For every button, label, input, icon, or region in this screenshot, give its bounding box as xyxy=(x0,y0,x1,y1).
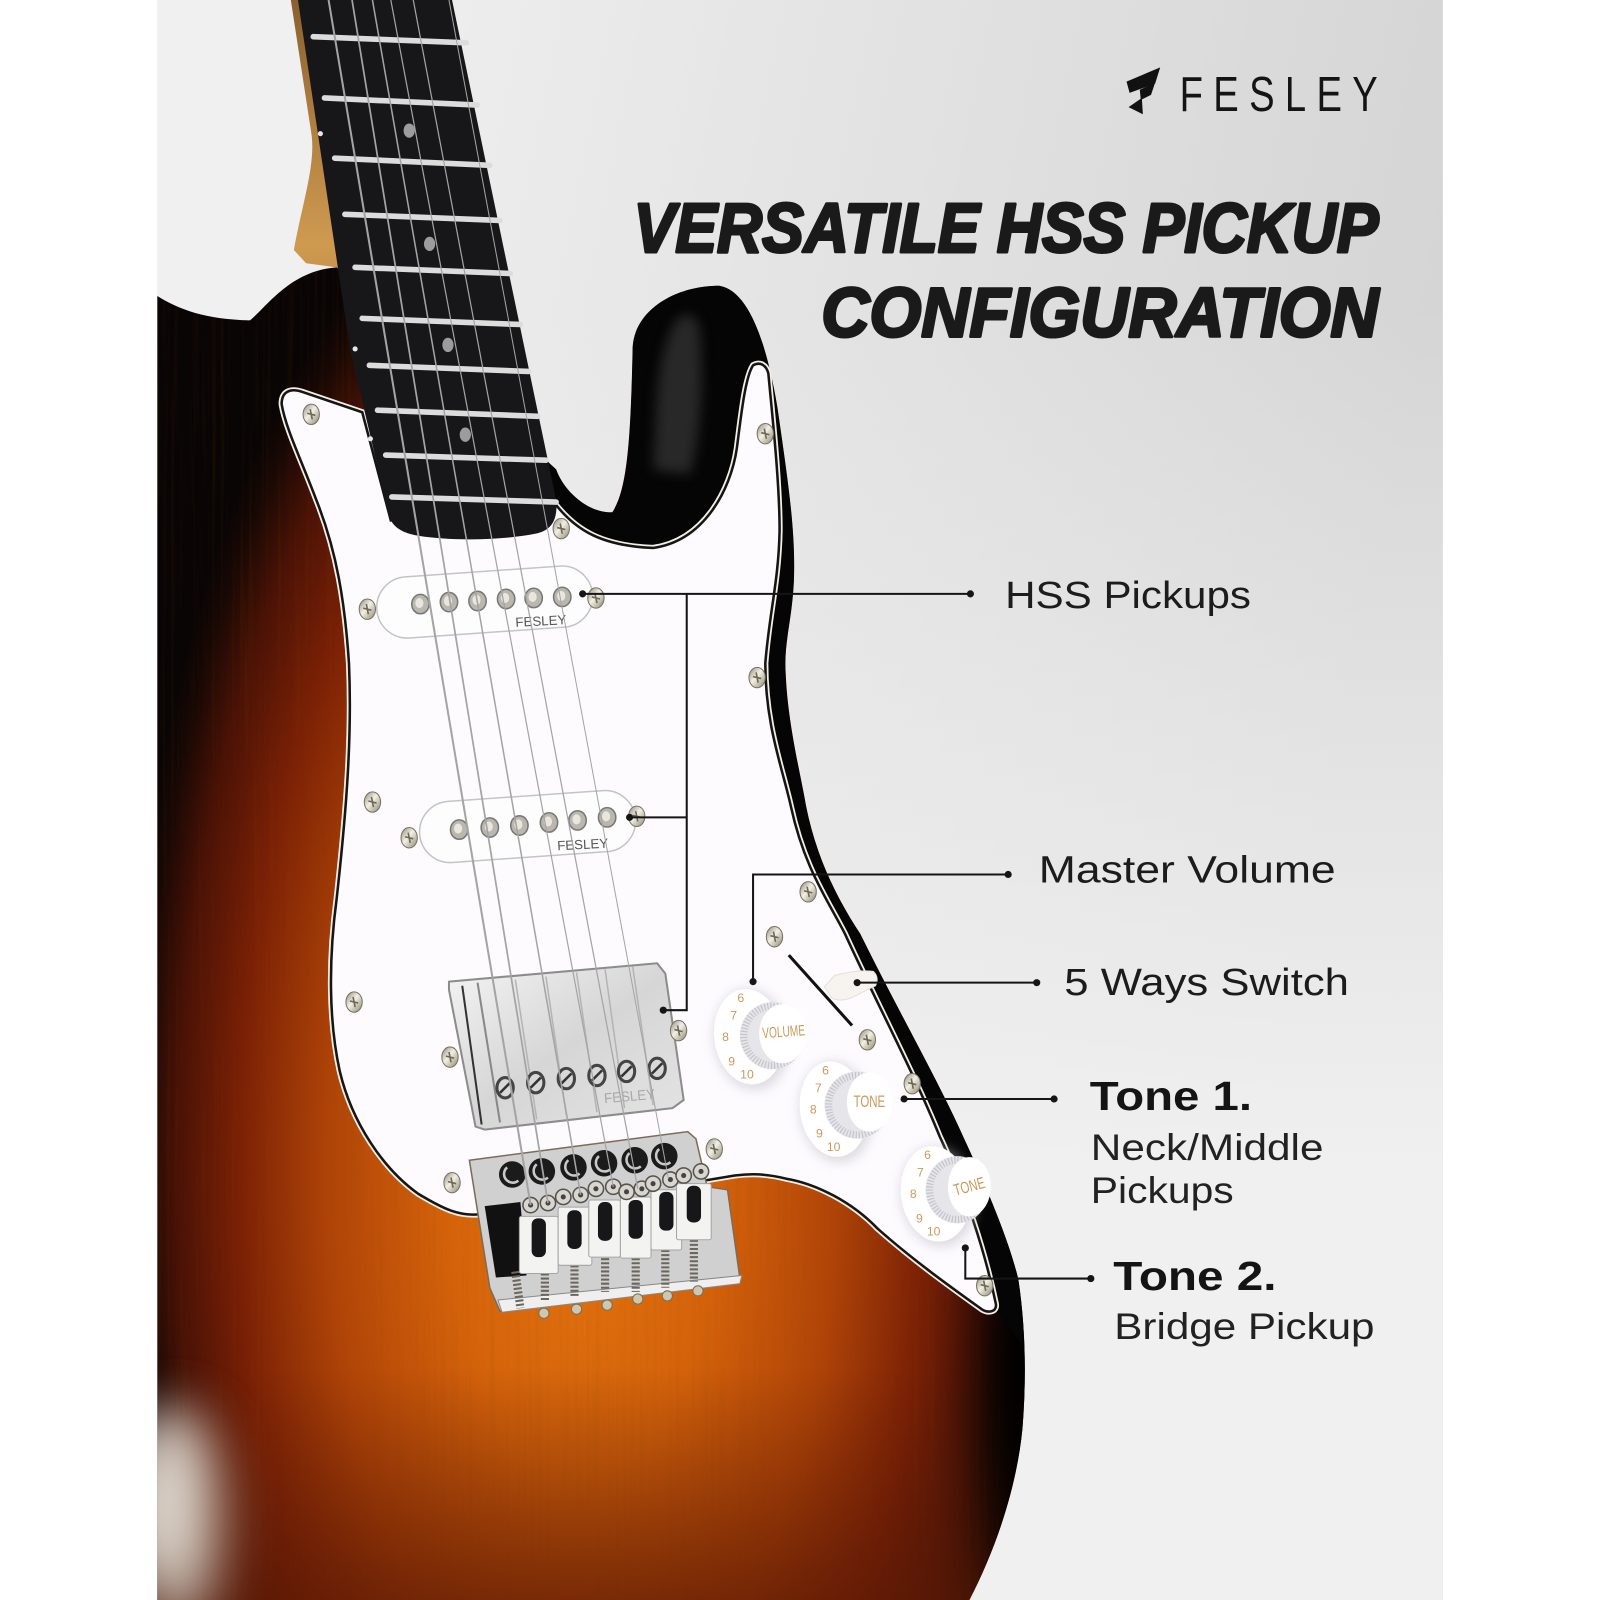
label: Master Volume: Master Volume xyxy=(1039,849,1336,891)
tone knob 2: TONE xyxy=(952,1174,987,1200)
middle pickup xyxy=(418,788,638,865)
tone knob 1: 9 xyxy=(816,1127,823,1141)
leader lines xyxy=(579,590,1094,1282)
volume knob: VOLUME xyxy=(762,1022,806,1042)
bridge humbucker pickup xyxy=(449,963,684,1130)
volume knob: 6 xyxy=(737,991,744,1005)
label: Tone 1: Neck/Middle xyxy=(1091,1127,1323,1168)
middle pickup: FESLEY xyxy=(557,836,609,853)
neck pickup xyxy=(375,564,595,640)
volume knob xyxy=(708,984,806,1094)
logo: FESLEY: FESLEY xyxy=(1180,68,1378,122)
tone knob 1: 7 xyxy=(815,1081,822,1095)
tone knob 2: 10 xyxy=(927,1225,941,1239)
label: Tone 2 xyxy=(1113,1253,1374,1347)
tone knob 1: TONE xyxy=(854,1093,885,1111)
tone knob 2 xyxy=(895,1142,991,1251)
label: Tone 1: Tone 1. xyxy=(1090,1073,1252,1119)
maple neck xyxy=(291,0,396,510)
five way switch xyxy=(789,955,877,1026)
label: Tone 1 xyxy=(1090,1073,1323,1211)
label: 5 Ways Switch: 5 Ways Switch xyxy=(1064,961,1349,1003)
title: VERSATILE HSS PICKUP xyxy=(634,189,1379,267)
label: Tone 1: Pickups xyxy=(1091,1170,1234,1211)
title: CONFIGURATION xyxy=(821,274,1380,352)
title xyxy=(634,189,1380,352)
neck pickup: FESLEY xyxy=(515,612,567,630)
volume knob: 9 xyxy=(728,1054,735,1068)
tone knob 1: 6 xyxy=(822,1063,829,1077)
tone knob 1: 8 xyxy=(810,1102,817,1116)
volume knob: 10 xyxy=(740,1068,754,1082)
volume knob: 7 xyxy=(730,1008,737,1022)
tone knob 1: 10 xyxy=(827,1140,841,1154)
fretboard xyxy=(298,0,556,539)
label: HSS Pickups: HSS Pickups xyxy=(1005,574,1251,616)
bridge humbucker pickup: FESLEY xyxy=(603,1087,656,1107)
tremolo bridge xyxy=(469,1132,742,1318)
tone knob 1 xyxy=(794,1057,892,1166)
strings xyxy=(329,0,668,1205)
pickguard xyxy=(282,364,996,1312)
tone knob 2: 8 xyxy=(910,1187,917,1201)
tone knob 2: 9 xyxy=(916,1211,923,1225)
guitar photo xyxy=(134,0,1087,1600)
label: Tone 2: Bridge Pickup xyxy=(1114,1306,1374,1347)
tone knob 2: 7 xyxy=(917,1166,924,1180)
label: Tone 2: Tone 2. xyxy=(1113,1253,1277,1299)
pickguard screws xyxy=(303,404,993,1296)
volume knob: 8 xyxy=(722,1030,729,1044)
icon: Fesley wing mark xyxy=(1127,67,1160,114)
guitar body xyxy=(157,268,1025,1600)
tone knob 2: 6 xyxy=(924,1148,931,1162)
